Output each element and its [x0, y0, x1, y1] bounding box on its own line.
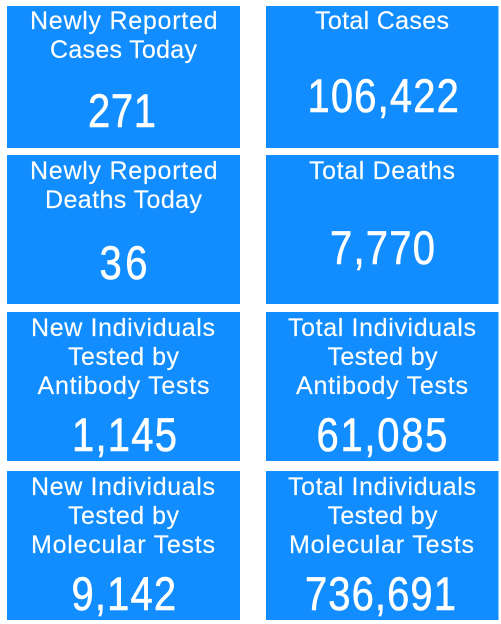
heading: newly reported cases today — [30, 7, 218, 64]
number: 9,142: 9,142 — [72, 569, 176, 621]
heading: newly reported deaths today: Newly Reported — [30, 157, 218, 185]
heading: total individuals tested by molecular tests — [288, 473, 476, 559]
heading: new individuals tested by antibody tests: Tested by — [68, 343, 180, 371]
heading: new individuals tested by molecular tests — [31, 473, 215, 559]
panel: newly reported cases today — [7, 6, 240, 148]
number: 36: 36 — [100, 238, 148, 290]
panel: total deaths — [266, 155, 498, 304]
number: 106,422: 106,422 — [308, 71, 459, 123]
heading: total individuals tested by molecular tests: Tested by — [328, 502, 438, 530]
heading: total cases: Total Cases — [315, 7, 449, 35]
panel: newly reported deaths today — [7, 155, 240, 304]
heading: newly reported deaths today: Deaths Today — [45, 186, 202, 214]
heading: total individuals tested by antibody tests: Antibody Tests — [296, 372, 468, 400]
panel: total cases — [266, 6, 498, 148]
panel: new individuals tested by antibody tests — [7, 312, 240, 462]
number: 271: 271 — [88, 86, 156, 138]
heading: total individuals tested by antibody tests: Total Individuals — [288, 314, 476, 342]
heading: new individuals tested by molecular tests: New Individuals — [31, 473, 215, 501]
number: 7,770: 7,770 — [330, 223, 435, 275]
panel: total individuals tested by molecular tests — [266, 471, 498, 621]
number: 61,085: 61,085 — [316, 410, 447, 462]
heading: new individuals tested by molecular tests: Molecular Tests — [31, 531, 215, 559]
panel: new individuals tested by molecular tests — [7, 471, 240, 621]
heading: newly reported cases today: Newly Reported — [30, 7, 218, 35]
heading: total individuals tested by molecular tests: Total Individuals — [288, 473, 476, 501]
number: 736,691: 736,691 — [305, 569, 456, 621]
heading: total individuals tested by antibody tests — [288, 314, 476, 400]
heading: new individuals tested by antibody tests: New Individuals — [31, 314, 215, 342]
heading: newly reported cases today: Cases Today — [50, 36, 198, 64]
heading: new individuals tested by antibody tests: Antibody Tests — [38, 372, 210, 400]
heading: new individuals tested by antibody tests — [31, 314, 215, 400]
heading: total deaths: Total Deaths — [309, 157, 455, 185]
number: 1,145: 1,145 — [72, 410, 177, 462]
heading: new individuals tested by molecular tests: Tested by — [68, 502, 180, 530]
heading: total individuals tested by antibody tests: Tested by — [328, 343, 438, 371]
heading: total individuals tested by molecular tests: Molecular Tests — [289, 531, 474, 559]
heading: newly reported deaths today — [30, 157, 218, 214]
panel: total individuals tested by antibody tests — [266, 312, 498, 462]
